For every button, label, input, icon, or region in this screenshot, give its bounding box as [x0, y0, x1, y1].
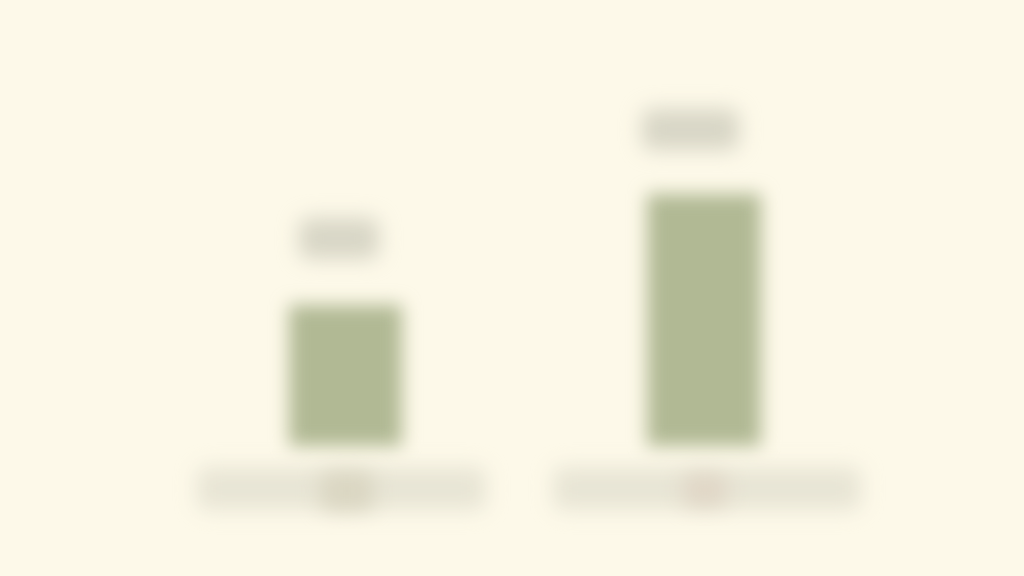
value label: left bar [299, 218, 379, 259]
bar: left [289, 305, 402, 446]
value label: right bar [642, 109, 739, 150]
label detail: left [320, 472, 374, 510]
label detail: right [683, 474, 727, 506]
category label: right bar [553, 467, 861, 510]
category label: left bar [197, 467, 486, 510]
bar: right [647, 194, 761, 446]
